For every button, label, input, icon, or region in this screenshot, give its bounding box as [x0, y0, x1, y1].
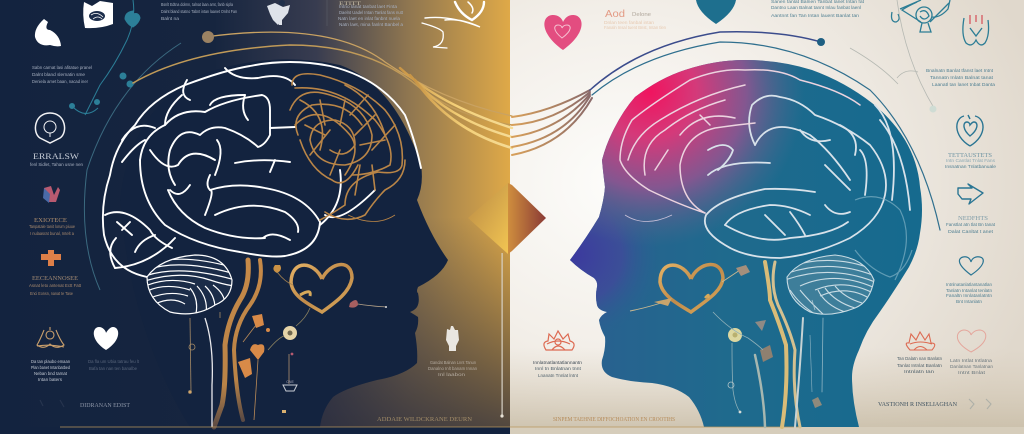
divider and text block: top centre-right: Daelnt Uadel Intan Tanlat fans nutt: [339, 10, 404, 15]
text block: right upper: Bnalnatn Banlat tfanst laet Intnt: [926, 68, 994, 73]
text block: NEDFHTS: NEDFHTS: [958, 216, 988, 222]
heading: Aod Delone: Aod: [605, 8, 625, 20]
icon: white crescent: [35, 19, 61, 46]
text block: heart caption right: Latn Intlat Intlatna: [950, 358, 993, 363]
icon: teal tree fan: [892, 0, 950, 32]
icon: top ornament: [267, 0, 290, 25]
text block: TETTAUSTETS: Intn Cantlat Tnlat Fans: [946, 158, 996, 163]
icon: coloured ribbon mark: [43, 186, 60, 203]
text block: EECEANNOSEE: Asnat leto antenat Ectt Fatt: [29, 283, 82, 288]
small emblem under sprig: ONE: [286, 380, 294, 384]
text block: lotus caption left of head: Lnanatn Tnnlat lntnt: [538, 373, 579, 378]
icon: white heart: [94, 327, 118, 350]
text block: right upper: [926, 68, 996, 87]
icon: teal heart in ring: [957, 115, 983, 146]
right brain lobes, light strokes: [705, 96, 910, 258]
footer label centre-left: ADDAIE WILDCKRANE DEURN: [377, 417, 473, 423]
text block: EXIOTECE: EXIOTECE: [34, 217, 67, 224]
text block: lotus caption left of head: Innl tn Bnlatnan tnnt: [535, 366, 582, 371]
icon: red lotus: [906, 332, 935, 350]
text block: heart description: Intnlnatanlatlantanatlan: [946, 282, 993, 287]
text block: faint heart caption: Bafa tan nan ten banalbe: [89, 366, 138, 371]
text block: heart caption right: Intnt Bnlat: [958, 370, 986, 375]
icon: red lotus left of head: [544, 331, 574, 350]
ribbon end dot left: [202, 31, 214, 43]
text block: top centre-left: Bsnlt Edtna dolmn, talnat laan amt, fanb sipla: [161, 2, 233, 7]
left head silhouette: [120, 59, 448, 427]
text block: EXIOTECE: I nulaasrat bunal, Intelt a: [30, 231, 75, 236]
text block: top centre-left: [161, 2, 237, 21]
icon: teal hands with red: [963, 15, 989, 45]
text block: EECEANNOSEE: Enci Eonsn, nanat te Tase: [30, 291, 73, 296]
icon: meditating lotus: [37, 327, 64, 347]
text block: EECEANNOSEE: EECEANNOSEE: [32, 275, 78, 282]
left brain outline: [103, 62, 421, 277]
text block: top left lines: Dalnt bland slernatin sme: [32, 72, 86, 77]
golden flowing ribbons across the divide: [133, 32, 940, 230]
heading: Aod Delone: Dnlan teen fanbal intan: [604, 20, 655, 25]
text block: EXIOTECE: Tanpatale tanit lorum piuue: [29, 224, 75, 229]
icon: white hand: [446, 326, 459, 351]
icon: orange plus: [41, 250, 61, 266]
icon: circled brain pin: [35, 113, 65, 143]
left brain annotation curve: [348, 215, 395, 222]
panel: light right background: [510, 0, 1024, 434]
text block: right upper: Tannatn Inlatn Balnat tanat: [930, 75, 994, 80]
text block: lotus caption: Da tan plaubo emaan: [31, 359, 71, 364]
text block: lotus caption right: [897, 356, 943, 374]
heading: Aod Delone: Fanaln Insal tuent Bnst, Intan tlen: [604, 25, 667, 30]
divider and text block: top centre-right: ETITT: [339, 2, 361, 7]
right neck bands: [755, 262, 823, 427]
text block: heart description: Tanlatn Intanlat tenlatn: [946, 288, 993, 293]
left neck thin nerve with nodes: [188, 312, 220, 394]
icon: outline heart: [959, 257, 983, 275]
faint curved arc on left: [84, 43, 181, 290]
right flowers and sprigs: [713, 300, 822, 413]
footer label centre-right: SINPEM TAEHNIE DIFFOCHOATION EN CROOTIHS: [553, 417, 675, 423]
text block: ERRALSW: fenl Sidlet, Tahan usne nen: [30, 162, 84, 167]
gold centre diamond: [468, 183, 546, 418]
text block: top left lines: Sabn carnat lasi afitatue pranel: [32, 65, 92, 70]
footer label left: DIDRANAN EDIST: [80, 403, 130, 409]
text block: lotus caption: Neban bnd tarnat: [34, 371, 68, 376]
left neck bands: [214, 260, 261, 427]
icon: pink heart: [544, 15, 582, 50]
icon: teal heart tip at top: [696, 0, 736, 24]
text block: lotus caption right: Tan Dalatn nan Banlatn: [897, 356, 943, 361]
text block: lotus caption left of head: Innlatnatlantatlannantn: [533, 360, 583, 365]
divider and text block: top centre-right: Natn laet en inlat fanbnt nuela: [338, 16, 401, 21]
divider and text block: top centre-right: [327, 0, 404, 27]
text block: hand caption: [428, 360, 478, 377]
text block: NEDFHTS: [946, 216, 996, 234]
right chevrons: [969, 399, 991, 409]
heading: Aod Delone: [604, 8, 667, 30]
text block: hand caption: Gandat Balnan Lnnt Tanun: [430, 360, 476, 365]
divider and text block: top centre-right: Intno lanat tanbat laet Finta: [339, 4, 398, 9]
left neck white line: [205, 318, 212, 427]
text block: heart description: Fanaltn Innlatanlatntn: [946, 293, 993, 298]
right lower brain contour: [855, 197, 912, 280]
divider and text block: top centre-right: Natn laet, mina fanlnt Banbel a: [339, 22, 404, 27]
text block: lotus caption right: Tanlat Intnlat Banlatn: [897, 363, 943, 368]
icon: white heart scribble with swooshes: [422, 2, 484, 48]
text block: heart caption right: Danlatnan Tanlatnan: [950, 364, 994, 369]
left faint chevrons: [40, 400, 64, 407]
text block: top centre-left: Dalnt bland statno Tabnt intan laanet Onlnt Fan: [161, 9, 237, 14]
small emblem under sprig: [283, 380, 297, 391]
text block: faint heart caption: Da fla um Ubia tatrau feu lt: [88, 359, 140, 364]
text block: lotus caption: [31, 359, 71, 382]
text block: top right centre: Aantnnt fan Tan Intan lauent Banlat tan: [771, 13, 860, 18]
left gold heart with branches: [273, 265, 387, 312]
text block: top right centre: Dantno Laan Balnat tannt Inlau fanbat laenl: [771, 5, 861, 10]
text block: lotus caption right: Intnlatn Ian: [904, 369, 935, 374]
text block: top left lines: [32, 65, 92, 84]
text block: EECEANNOSEE: [29, 275, 82, 296]
text block: hand caption: Inl laabon: [438, 372, 466, 377]
text block: top right centre: [771, 0, 865, 18]
text block: top centre-left: Balnt na: [161, 16, 180, 21]
text block: lotus caption: Intan baters: [38, 377, 63, 382]
text block: hand caption: Danalno Inlt banaIn Innan: [428, 366, 478, 371]
icon: pale outline heart: [957, 330, 986, 352]
text block: lotus caption left of head: [533, 360, 583, 378]
teal vine with hearts: [70, 0, 140, 115]
faint dot: [930, 106, 936, 112]
faint connector line at right: [850, 0, 934, 108]
text block: ERRALSW: [30, 151, 84, 167]
text block: heart description: [946, 282, 993, 304]
text block: NEDFHTS: Fanstlat atn tlat Bn tanat: [946, 222, 996, 227]
icon: teal outlined arrow: [958, 184, 983, 204]
left brain gold scribble region: [290, 74, 405, 220]
text block: NEDFHTS: Dalat Canltat t anet: [948, 229, 994, 234]
right cerebellum: [785, 255, 875, 316]
text block: TETTAUSTETS: TETTAUSTETS: [948, 153, 992, 159]
right brain upper folds, pink tint: [620, 70, 860, 213]
text block: TETTAUSTETS: [945, 153, 997, 169]
right head silhouette with gradient: [560, 50, 930, 430]
footer label right: VASTIONH R INSELIAGHAN: [878, 402, 958, 408]
text block: EXIOTECE: [29, 217, 75, 236]
right gold heart with arrow: [630, 265, 750, 312]
heading: Aod Delone: Delone: [632, 12, 651, 18]
text block: heart description: Bnt Intanlatn: [956, 299, 983, 304]
panel: dark left background: [0, 0, 510, 434]
left cerebellum: [145, 255, 235, 318]
text block: heart caption right: [950, 358, 994, 375]
icon: top white blob: [83, 1, 113, 28]
text block: right upper: Laanatl tan lanet tnbat Danta: [932, 82, 996, 87]
right annotation curve: [625, 215, 672, 222]
text block: ERRALSW: ERRALSW: [33, 151, 79, 161]
text block: TETTAUSTETS: Insnatnan Tnlatbanuale: [945, 164, 997, 169]
text block: lotus caption: Plan banet Intanbatbed: [31, 365, 70, 370]
text block: faint heart caption: [88, 359, 140, 371]
gold base line: [60, 426, 800, 428]
left flowers and sprigs: [238, 308, 310, 420]
ribbon end dot right: [817, 38, 825, 46]
text block: top left lines: Deniela amet baan, nacad iner: [32, 79, 88, 84]
